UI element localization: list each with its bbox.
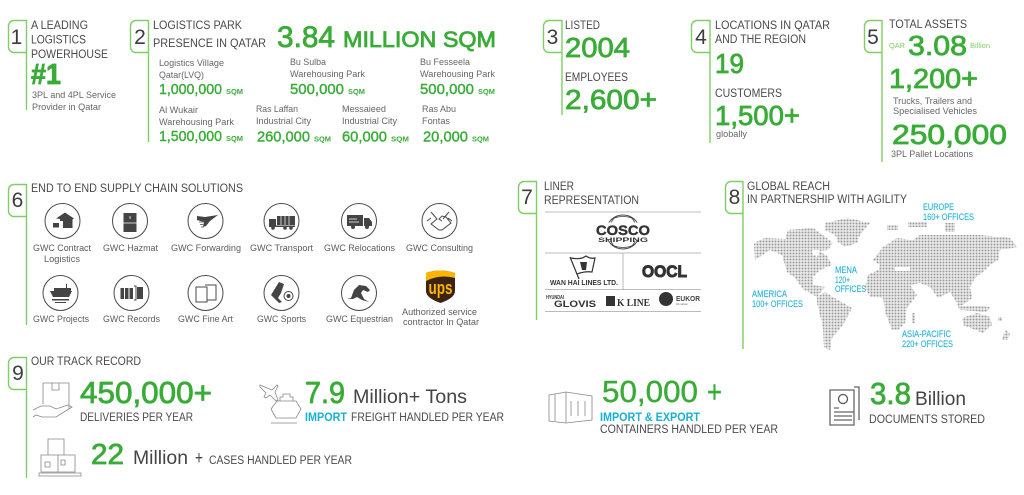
panel 3: listed and employees: LISTED [565, 20, 600, 32]
park: Messaieed: SQM [391, 136, 409, 144]
stat: import freight: 7.9 [305, 375, 345, 410]
panel 1: logistics powerhouse: A LEADING [31, 20, 88, 32]
region label: MENA: MENA [835, 265, 858, 276]
region label: Europe: 160+ OFFICES [923, 212, 974, 223]
logo: UPS authorized contractor: ups [428, 278, 452, 298]
stat: deliveries: 450,000+ [80, 375, 212, 410]
logo: UPS authorized contractor [402, 270, 479, 328]
park: Bu Fesseela: 500,000 [420, 82, 474, 98]
park: Messaieed: 60,000 [342, 130, 387, 146]
park: Bu Sulba: SQM [348, 89, 365, 96]
park: Logistics Village Qatar [159, 58, 243, 98]
panel 1: logistics powerhouse: Provider in Qatar [32, 102, 101, 113]
region label: MENA: OFFICES [835, 284, 866, 295]
service: contract logistics: GWC Contract [33, 243, 91, 254]
service: hazmat: GWC Hazmat [103, 243, 158, 254]
panel 4: locations and customers: LOCATIONS IN QATAR [715, 20, 830, 32]
park: Logistics Village Qatar: 1,000,000 [159, 82, 222, 98]
panel 6: supply chain solutions: 6 [12, 189, 23, 212]
park: Bu Sulba: Warehousing Park [290, 69, 365, 80]
panel 2: logistics park presence [130, 20, 496, 146]
park: Ras Abu Fontas: 20,000 [423, 130, 468, 146]
panel 9: track record [8, 356, 985, 478]
panel 5: total assets: 3PL Pallet Locations [891, 149, 973, 160]
panel 5: total assets: Billion [970, 41, 990, 50]
stat: cases: + [195, 448, 203, 469]
panel 3: listed and employees: 3 [547, 26, 558, 49]
panel 4: locations and customers: globally [716, 129, 747, 140]
panel 4: locations and customers: AND THE REGION [715, 34, 806, 46]
logo: COSCO Shipping [596, 215, 650, 249]
service: projects [33, 276, 89, 325]
service: forwarding [171, 204, 241, 254]
service: projects: GWC Projects [33, 314, 89, 325]
region label: Asia-Pacific: ASIA-PACIFIC [902, 329, 951, 340]
panel 1: logistics powerhouse: LOGISTICS [31, 34, 86, 46]
panel 6: supply chain solutions [8, 183, 479, 328]
icon: plane and ship [260, 385, 301, 423]
region label: Asia-Pacific [902, 329, 953, 350]
park: Ras Laffan: Industrial City [256, 116, 311, 127]
stat: documents: Billion [915, 389, 966, 410]
panel 9: track record: OUR TRACK RECORD [31, 356, 141, 368]
stat: import freight: FREIGHT HANDLED PER YEAR [351, 412, 504, 424]
park: Logistics Village Qatar: Logistics Village [159, 58, 224, 69]
panel 9: track record: 9 [12, 362, 24, 385]
logo: Hyundai Glovis: HYUNDAI [546, 295, 564, 301]
park: Al Wukair [159, 105, 243, 145]
region label: America: 100+ OFFICES [752, 299, 803, 310]
panel 3: listed and employees: 2004 [565, 32, 630, 63]
logo: Wan Hai Lines [550, 256, 618, 287]
logo: COSCO Shipping: SHIPPING [598, 237, 648, 244]
panel 8: global reach: IN PARTNERSHIP WITH AGILITY [747, 194, 907, 206]
panel 5: total assets: Specialised Vehicles [893, 106, 977, 117]
panel 1: logistics powerhouse: 1 [11, 26, 22, 49]
service: forwarding: GWC Forwarding [171, 243, 241, 254]
panel 7: liner representation: LINER [544, 181, 574, 193]
region label: Asia-Pacific: 220+ OFFICES [902, 339, 953, 350]
panel 3: listed and employees: EMPLOYEES [565, 72, 628, 84]
panel 8: global reach [726, 181, 1017, 350]
panel 1: logistics powerhouse [8, 20, 116, 113]
service: relocations [324, 204, 395, 254]
panel 2: logistics park presence: PRESENCE IN QATAR [153, 38, 266, 50]
stat: containers: CONTAINERS HANDLED PER YEAR [600, 424, 778, 436]
panel 2: logistics park presence: LOGISTICS PARK [153, 20, 242, 32]
panel 4: locations and customers: CUSTOMERS [715, 88, 782, 100]
park: Bu Sulba [290, 57, 365, 98]
panel 3: listed and employees [544, 20, 657, 115]
stat: deliveries: DELIVERIES PER YEAR [80, 412, 193, 424]
park: Ras Abu Fontas: Ras Abu [422, 104, 456, 115]
logo: UPS authorized contractor: Authorized service [402, 307, 477, 318]
park: Ras Laffan: Ras Laffan [256, 104, 298, 115]
panel 5: total assets: TOTAL ASSETS [889, 19, 967, 31]
region label: America [752, 289, 803, 310]
park: Bu Fesseela: Bu Fesseela [420, 57, 471, 68]
park: Ras Abu Fontas: SQM [472, 136, 489, 144]
service: hazmat [103, 204, 158, 254]
service: contract logistics: Logistics [44, 254, 80, 265]
panel 8: global reach: 8 [729, 186, 740, 209]
stat: cases: Million [133, 448, 188, 469]
stat: containers [549, 374, 778, 436]
park: Bu Fesseela: Warehousing Park [420, 69, 495, 80]
panel 5: total assets: Trucks, Trailers and [893, 96, 972, 107]
region label: MENA: 120+ [835, 275, 850, 286]
service: contract logistics [33, 204, 91, 265]
service: transport: GWC Transport [250, 243, 313, 254]
stat: cases: 22 [91, 439, 124, 471]
stat: documents [830, 376, 985, 426]
stat: import freight: IMPORT [305, 412, 347, 424]
stat: import freight [260, 375, 504, 424]
park: Al Wukair: 1,500,000 [159, 129, 222, 145]
panel 1: logistics powerhouse: 3PL and 4PL Service [32, 90, 116, 101]
icon: documents [830, 387, 859, 425]
service: relocations: GWC Relocations [324, 243, 395, 254]
park: Bu Sulba: 500,000 [290, 82, 344, 98]
service: records [103, 276, 160, 325]
stat: cases: CASES HANDLED PER YEAR [209, 455, 352, 467]
region label: Europe: EUROPE [923, 202, 954, 213]
stat: import freight: Million+ Tons [353, 387, 467, 408]
panel 5: total assets: 1,200+ [889, 63, 978, 94]
park: Bu Fesseela: SQM [478, 89, 495, 96]
park: Al Wukair: Al Wukair [159, 105, 198, 116]
icon: shipping container [549, 392, 592, 423]
icon: box on hand [33, 383, 72, 417]
park: Bu Fesseela [420, 57, 495, 98]
park: Bu Sulba: Bu Sulba [290, 57, 327, 68]
park: Messaieed [342, 104, 409, 146]
park: Messaieed: Industrial City [342, 116, 397, 127]
park: Ras Abu Fontas [422, 104, 489, 146]
panel 5: total assets: QAR [889, 41, 906, 50]
service: equestrian [326, 276, 393, 325]
park: Al Wukair: SQM [226, 136, 243, 143]
park: Logistics Village Qatar: Qatar(LVQ) [159, 70, 204, 81]
panel 2: logistics park presence: MILLION SQM [343, 27, 496, 52]
panel 2: logistics park presence: 3.84 [277, 21, 335, 54]
panel 4: locations and customers [692, 20, 830, 143]
panel 5: total assets [864, 19, 1007, 162]
service: consulting [406, 204, 473, 254]
stat: containers: IMPORT & EXPORT [600, 412, 700, 424]
region label: MENA [835, 265, 866, 295]
park: Ras Laffan [256, 104, 331, 146]
service: equestrian: GWC Equestrian [326, 314, 393, 325]
panel 7: liner representation: REPRESENTATION [544, 195, 639, 207]
region label: America: AMERICA [752, 289, 788, 300]
panel 1: logistics powerhouse: #1 [31, 59, 61, 91]
stat: cases [39, 439, 352, 476]
stat: deliveries [33, 375, 212, 424]
logo: Eukor: EUKOR [676, 296, 700, 303]
park: Ras Laffan: 260,000 [257, 130, 310, 146]
panel 7: liner representation: 7 [521, 186, 533, 209]
service: consulting: GWC Consulting [406, 243, 473, 254]
logo: UPS authorized contractor: contractor In Qatar [403, 317, 479, 328]
logo: Wan Hai Lines: WAN HAI LINES LTD. [550, 280, 618, 287]
park: Ras Abu Fontas: Fontas [422, 116, 450, 127]
panel 4: locations and customers: 19 [715, 48, 744, 79]
service: transport [250, 204, 313, 254]
panel 4: locations and customers: 1,500+ [715, 100, 800, 131]
icon: pallet of boxes [39, 439, 81, 476]
panel 5: total assets: 250,000 [892, 119, 1007, 150]
panel 4: locations and customers: 4 [695, 26, 707, 49]
logo: Eukor: We deliver [676, 302, 688, 306]
panel 5: total assets: 5 [867, 26, 879, 49]
logo: Hyundai Glovis: GLOVIS [554, 299, 596, 310]
logo: K Line [606, 296, 650, 309]
panel 2: logistics park presence: 2 [134, 26, 146, 49]
panel 3: listed and employees: 2,600+ [565, 84, 657, 115]
panel 8: global reach: GLOBAL REACH [747, 181, 830, 193]
panel 7: liner representation [518, 181, 701, 320]
logo: Eukor [659, 292, 700, 306]
service: records: GWC Records [103, 314, 160, 325]
logo: K Line: K LINE [617, 298, 650, 309]
logo: COSCO Shipping: COSCO [596, 223, 650, 238]
logo: Hyundai Glovis [546, 295, 596, 310]
region label: Europe [923, 202, 974, 223]
panel 5: total assets: 3.08 [908, 30, 967, 61]
stat: documents: DOCUMENTS STORED [869, 414, 985, 426]
panel 1: logistics powerhouse: POWERHOUSE [31, 49, 108, 61]
logo: OOCL: OOCL [642, 262, 687, 281]
park: Messaieed: Messaieed [342, 104, 386, 115]
stat: containers: + [707, 374, 722, 409]
park: Al Wukair: Warehousing Park [159, 117, 234, 128]
panel 6: supply chain solutions: END TO END SUPPLY CHAIN SOLUTIONS [31, 183, 243, 195]
service: sports: GWC Sports [257, 314, 306, 325]
stat: documents: 3.8 [870, 376, 911, 411]
service: fine art: GWC Fine Art [178, 314, 233, 325]
stat: containers: 50,000 [602, 374, 698, 409]
dotted world map [754, 218, 1017, 350]
service: sports [257, 276, 306, 325]
service: fine art [178, 276, 233, 325]
park: Logistics Village Qatar: SQM [226, 89, 243, 96]
park: Ras Laffan: SQM [314, 136, 331, 144]
